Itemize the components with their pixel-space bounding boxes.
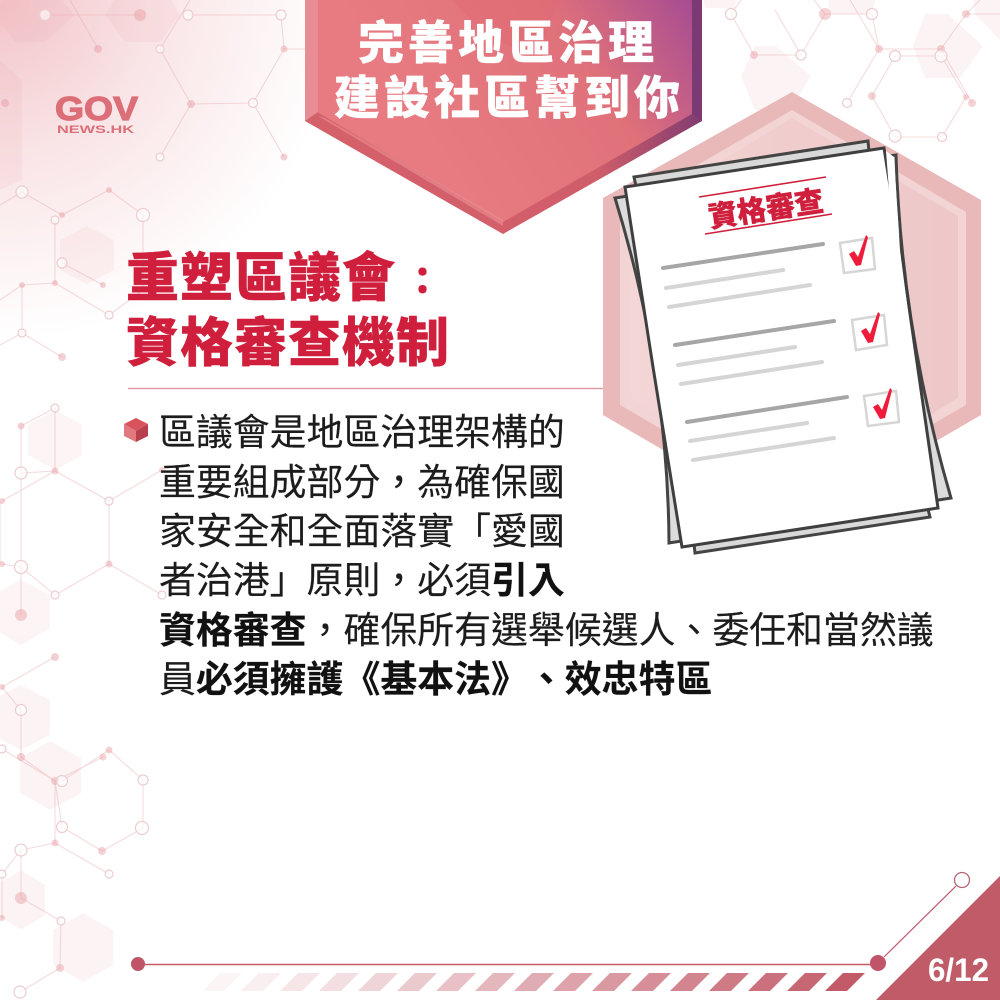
back sheet lower — [615, 155, 951, 543]
body text: 家安全和全面落實「愛國 — [159, 511, 565, 552]
main heading: 資格審查機制 — [126, 314, 450, 373]
body text: 者治港」原則，必須引入 — [159, 560, 565, 601]
sheet heading: 資格審查 — [706, 184, 826, 234]
main sheet — [625, 148, 938, 547]
GOV News.HK logo: GOV — [55, 90, 138, 127]
checklist item 2 — [675, 312, 887, 384]
main heading: 重塑區議會： — [126, 249, 442, 308]
main heading — [126, 249, 450, 373]
checklist item 1 — [663, 235, 875, 307]
illustration: stack of paper checklist — [615, 141, 951, 553]
banner title — [334, 17, 684, 124]
bullet cube icon — [124, 418, 148, 442]
page number corner — [876, 876, 1000, 1000]
GOV News.HK logo: NEWS.HK — [57, 124, 134, 136]
body text — [159, 412, 934, 700]
body text: 區議會是地區治理架構的 — [159, 412, 565, 453]
body text: 重要組成部分，為確保國 — [159, 462, 565, 503]
divider rule — [128, 388, 606, 390]
banner title: 建設社區幫到你 — [334, 72, 684, 124]
illustration: hexagon backdrop — [603, 92, 981, 525]
page number corner: 6/12 — [928, 952, 989, 988]
body text: 員必須擁護《基本法》、效忠特區 — [159, 659, 712, 700]
sheet heading rules — [699, 177, 832, 234]
banner title: 完善地區治理 — [358, 17, 658, 69]
checklist item 3 — [687, 388, 899, 460]
footer stripes — [202, 973, 865, 991]
white strip on right side — [886, 151, 909, 320]
body text: 資格審查，確保所有選舉候選人、委任和當然議 — [159, 610, 934, 651]
back sheet upper — [634, 141, 930, 553]
footer timeline — [131, 872, 970, 971]
top banner — [305, 0, 702, 234]
